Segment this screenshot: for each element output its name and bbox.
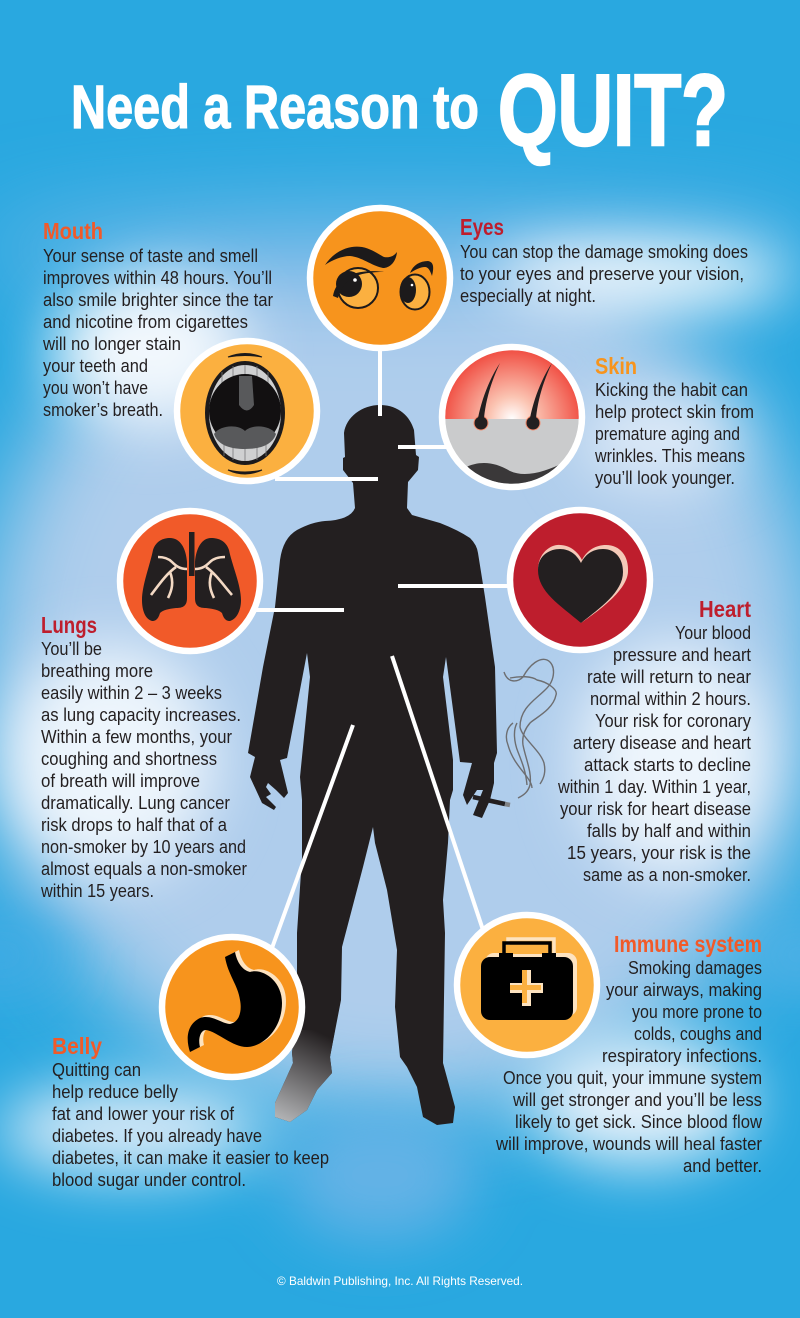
text: belly: help reduce belly bbox=[52, 1081, 179, 1102]
text: mouth: smoker’s breath. bbox=[43, 399, 163, 420]
text: belly: blood sugar under control. bbox=[52, 1169, 246, 1190]
text: lungs: coughing and shortness bbox=[41, 748, 217, 769]
text: heart: your risk for heart disease bbox=[560, 798, 751, 819]
text: skin: help protect skin from bbox=[595, 401, 754, 422]
text: belly: diabetes. If you already have bbox=[52, 1125, 262, 1146]
text: immune system: respiratory infections. bbox=[602, 1045, 762, 1066]
text: immune system: will get stronger and you’ll be less bbox=[512, 1089, 762, 1110]
icon: stomach bbox=[162, 937, 302, 1077]
text: eyes bbox=[460, 214, 748, 306]
text: mouth bbox=[42, 218, 273, 420]
text: eyes: especially at night. bbox=[460, 285, 596, 306]
text: belly: fat and lower your risk of bbox=[52, 1103, 235, 1124]
text: skin: Skin bbox=[595, 353, 637, 379]
copyright: © Baldwin Publishing, Inc. All Rights Reserved. bbox=[277, 1274, 523, 1288]
text: mouth: and nicotine from cigarettes bbox=[43, 311, 248, 332]
text: lungs: non-smoker by 10 years and bbox=[41, 836, 246, 857]
text: belly bbox=[52, 1033, 329, 1190]
text: immune system: likely to get sick. Since blood flow bbox=[515, 1111, 763, 1132]
text: lungs: as lung capacity increases. bbox=[41, 704, 241, 725]
icon: first aid kit bbox=[457, 915, 597, 1055]
text: heart: same as a non-smoker. bbox=[583, 864, 751, 885]
text: heart: pressure and heart bbox=[613, 644, 751, 665]
text: mouth: also smile brighter since the tar bbox=[43, 289, 273, 310]
text: skin: wrinkles. This means bbox=[594, 445, 745, 466]
text: lungs: of breath will improve bbox=[41, 770, 200, 791]
text: belly: Belly bbox=[52, 1033, 102, 1059]
text: mouth: Your sense of taste and smell bbox=[43, 245, 258, 266]
title bbox=[71, 55, 728, 167]
text: eyes: to your eyes and preserve your vision, bbox=[460, 263, 744, 284]
text: lungs: within 15 years. bbox=[40, 880, 154, 901]
icon: skin bbox=[440, 345, 584, 490]
text: belly: diabetes, it can make it easier to keep bbox=[52, 1147, 329, 1168]
text: skin bbox=[594, 353, 754, 488]
text: lungs: easily within 2 – 3 weeks bbox=[41, 682, 222, 703]
text: heart: 15 years, your risk is the bbox=[567, 842, 751, 863]
text: immune system: Immune system bbox=[614, 931, 762, 957]
text: lungs: You’ll be bbox=[41, 638, 102, 659]
text: belly: Quitting can bbox=[52, 1059, 141, 1080]
text: immune system: Smoking damages bbox=[628, 957, 762, 978]
text: lungs: dramatically. Lung cancer bbox=[41, 792, 230, 813]
text: lungs: risk drops to half that of a bbox=[41, 814, 228, 835]
text: heart: artery disease and heart bbox=[573, 732, 751, 753]
title: QUIT? bbox=[498, 55, 728, 167]
silhouette of a man bbox=[248, 405, 510, 1125]
text: eyes: Eyes bbox=[460, 214, 504, 240]
text: heart: rate will return to near bbox=[587, 666, 751, 687]
text: heart: Heart bbox=[699, 596, 751, 622]
text: lungs: Within a few months, your bbox=[41, 726, 232, 747]
text: immune system: your airways, making bbox=[606, 979, 762, 1000]
icon: lungs bbox=[120, 511, 260, 651]
connector lines bbox=[255, 345, 512, 948]
text: lungs bbox=[40, 612, 247, 901]
text: mouth: you won’t have bbox=[43, 377, 148, 398]
text: lungs: almost equals a non-smoker bbox=[41, 858, 247, 879]
text: mouth: improves within 48 hours. You’ll bbox=[43, 267, 272, 288]
text: heart: falls by half and within bbox=[587, 820, 751, 841]
text: immune system: colds, coughs and bbox=[634, 1023, 762, 1044]
text: mouth: Mouth bbox=[43, 218, 103, 244]
text: mouth: your teeth and bbox=[43, 355, 148, 376]
text: lungs: breathing more bbox=[41, 660, 153, 681]
text: heart: within 1 day. Within 1 year, bbox=[557, 776, 751, 797]
icon: heart bbox=[510, 510, 650, 650]
icon: mouth bbox=[177, 341, 317, 481]
cigarette bbox=[473, 797, 505, 804]
text: heart: attack starts to decline bbox=[584, 754, 751, 775]
text: skin: premature aging and bbox=[595, 423, 740, 444]
text: heart: normal within 2 hours. bbox=[590, 688, 751, 709]
text: heart: Your blood bbox=[675, 622, 751, 643]
text: immune system: you more prone to bbox=[632, 1001, 762, 1022]
text: mouth: will no longer stain bbox=[42, 333, 181, 354]
text: immune system: and better. bbox=[683, 1155, 762, 1176]
text: heart: Your risk for coronary bbox=[595, 710, 752, 731]
text: heart bbox=[557, 596, 752, 885]
text: immune system: will improve, wounds will heal faster bbox=[495, 1133, 762, 1154]
text: immune system bbox=[495, 931, 763, 1176]
text: skin: Kicking the habit can bbox=[595, 379, 748, 400]
icon: eyes bbox=[310, 208, 450, 348]
icon: smoke curls bbox=[504, 659, 556, 798]
title: Need a Reason to bbox=[71, 73, 479, 141]
text: eyes: You can stop the damage smoking does bbox=[460, 241, 748, 262]
text: lungs: Lungs bbox=[41, 612, 97, 638]
text: immune system: Once you quit, your immune system bbox=[503, 1067, 762, 1088]
text: skin: you’ll look younger. bbox=[595, 467, 735, 488]
